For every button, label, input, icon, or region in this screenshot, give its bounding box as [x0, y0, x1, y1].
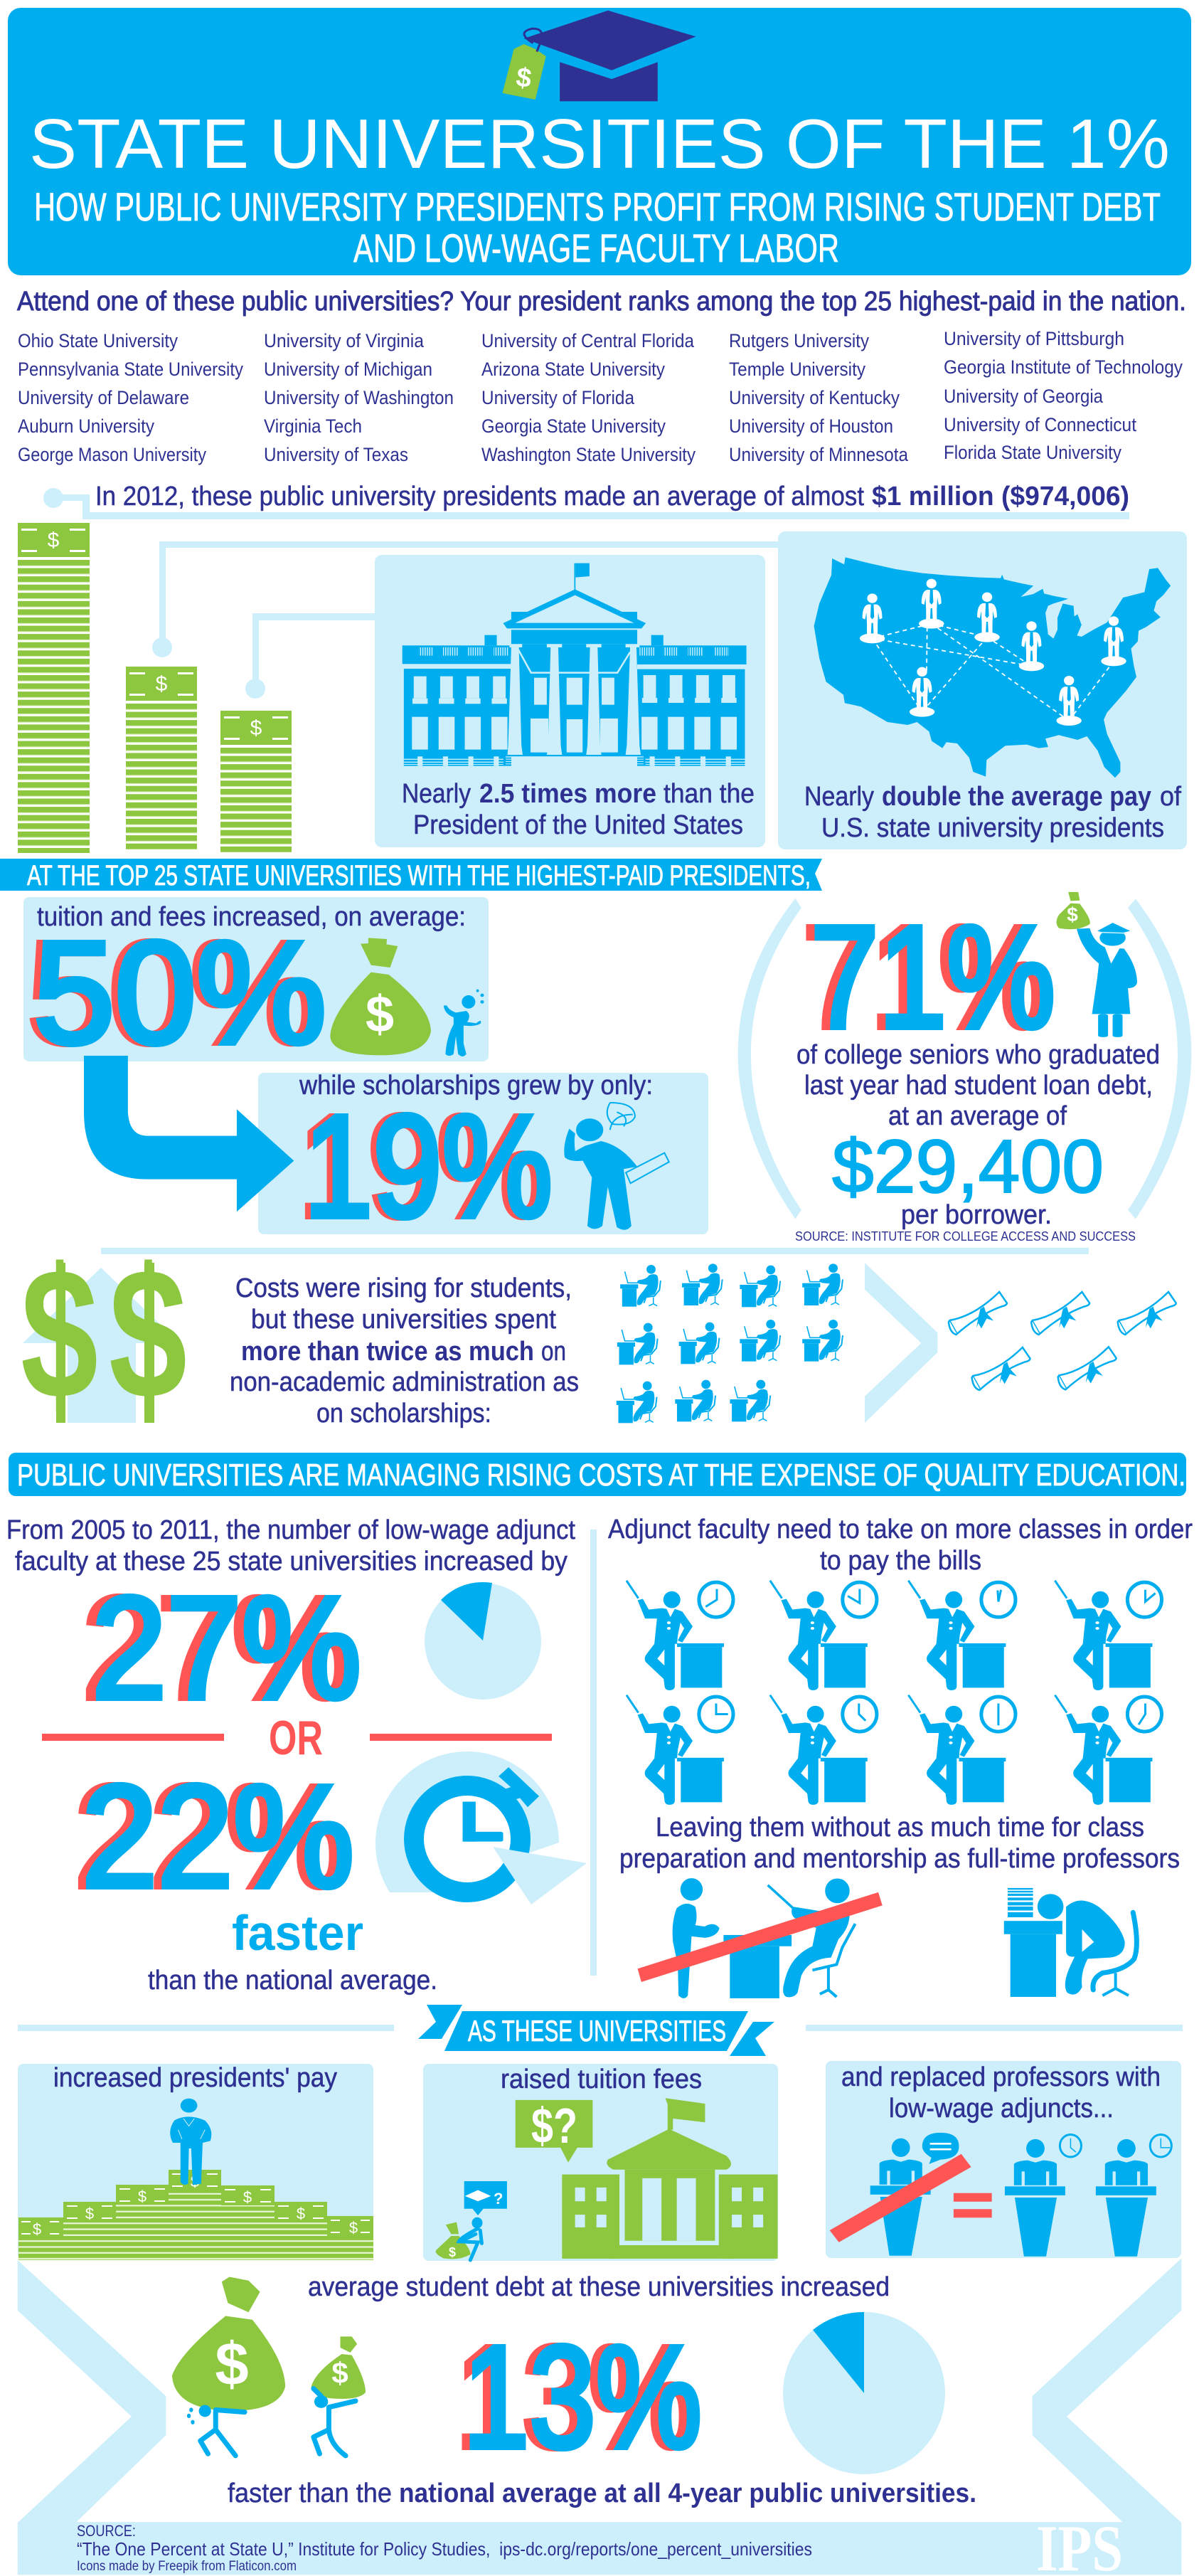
- panel: White House: [375, 555, 765, 847]
- university list: Pennsylvania State University: [18, 359, 243, 380]
- administration text: on scholarships:: [316, 1399, 491, 1429]
- icon: crossed-out mentoring: [638, 1878, 883, 1998]
- White House caption: 2.5 times more: [479, 779, 656, 809]
- ribbon heading: AS THESE UNIVERSITIES: [468, 2014, 726, 2047]
- divider: OR: OR: [269, 1711, 323, 1765]
- money stack: presidents: $: [48, 529, 60, 552]
- university list: University of Delaware: [18, 387, 189, 408]
- icon: graduation cap with price tag: [502, 11, 696, 101]
- money pyramid: $: [138, 2188, 146, 2205]
- university list: University of Georgia: [944, 386, 1104, 407]
- icon: person scratching head with diploma: [564, 1103, 669, 1230]
- university list: University of Florida: [481, 387, 635, 408]
- debt text: last year had student loan debt,: [804, 1071, 1153, 1101]
- university list: Florida State University: [944, 442, 1121, 463]
- money stack: presidents: [18, 523, 90, 853]
- university list: Rutgers University: [729, 330, 869, 351]
- panel: scholarships 19%: [258, 1071, 708, 1248]
- panel heading: [841, 2062, 1161, 2124]
- map caption: [804, 782, 1181, 843]
- icon: professor and adjuncts at podiums: [830, 2133, 1171, 2257]
- number: 71%: 71%: [811, 896, 1055, 1059]
- arrow: chevron: [865, 1263, 937, 1423]
- connector: top bar: [43, 488, 1129, 519]
- connector: panels: [152, 541, 785, 699]
- source block: [77, 2522, 812, 2574]
- White House caption: [402, 779, 755, 840]
- question mark: ?: [494, 2190, 503, 2207]
- university list: University of Minnesota: [729, 444, 909, 465]
- panel heading: increased presidents' pay: [53, 2063, 337, 2093]
- university list: Ohio State University: [18, 330, 178, 351]
- money stack: U.S. President: [126, 667, 197, 849]
- ribbon background: debt section: [18, 2258, 1181, 2575]
- source block: Icons made by Freepik from Flaticon.com: [77, 2559, 297, 2574]
- big bag dollar: $: [215, 2331, 249, 2398]
- panel heading: and replaced professors with: [841, 2062, 1161, 2092]
- average pay statement: In 2012, these public university presidents made an average of almost: [95, 482, 864, 512]
- money pyramid: $: [243, 2188, 252, 2206]
- number: 19%: 19%: [298, 1085, 547, 1248]
- than the national average: than the national average.: [148, 1966, 437, 1995]
- number: 27%: 27%: [82, 1567, 351, 1729]
- university list: Washington State University: [481, 444, 696, 465]
- icon group: diplomas: [949, 1292, 1176, 1390]
- tuition heading: tuition and fees increased, on average:: [37, 902, 466, 932]
- number: 50%: 50%: [27, 911, 320, 1074]
- money bag dollar sign: $: [366, 986, 394, 1043]
- administration text: non-academic administration as: [230, 1367, 579, 1397]
- money pyramid: [18, 2170, 373, 2260]
- adjunct classes text: to pay the bills: [820, 1546, 981, 1576]
- number: 13%: 13%: [463, 2316, 702, 2479]
- header banner: [8, 8, 1191, 275]
- panel: 71% callout: [738, 892, 1191, 1244]
- icon: rising costs arrow and dollars: [21, 1229, 187, 1438]
- number: 50%: 50%: [33, 911, 326, 1074]
- icon group: administrators at desks: [617, 1263, 843, 1423]
- university list: University of Pittsburgh: [944, 328, 1124, 349]
- section banner: quality education: [9, 1453, 1186, 1496]
- number: 13%: 13%: [455, 2316, 694, 2479]
- panel: tuition 50%: [23, 897, 489, 1074]
- word: faster: faster: [232, 1905, 363, 1961]
- White House caption: than the: [664, 779, 755, 809]
- number: 22%: 22%: [82, 1755, 354, 1918]
- university list: University of Central Florida: [481, 330, 695, 351]
- number: 27%: 27%: [92, 1567, 361, 1729]
- money pyramid: $: [33, 2220, 41, 2238]
- divider: OR: [42, 1711, 552, 1765]
- administration text: more than twice as much: [241, 1337, 534, 1367]
- adjunct classes text: [608, 1515, 1193, 1576]
- university list: Virginia Tech: [264, 415, 362, 437]
- adjunct growth text: [6, 1515, 575, 1576]
- number: $29,400: $29,400: [832, 1125, 1104, 1209]
- university list: University of Texas: [264, 444, 408, 465]
- debt conclusion: faster than the: [228, 2479, 392, 2508]
- ribbon heading: AT THE TOP 25 STATE UNIVERSITIES WITH THE HIGHEST-PAID PRESIDENTS,: [27, 860, 811, 891]
- tag dollar sign: $: [514, 63, 533, 94]
- source block: SOURCE:: [77, 2522, 136, 2540]
- panel: U.S. map: [778, 531, 1187, 849]
- university list: Auburn University: [18, 415, 154, 437]
- per borrower: per borrower.: [901, 1200, 1052, 1230]
- title: STATE UNIVERSITIES OF THE 1%: [29, 105, 1170, 183]
- debt text: [796, 1040, 1160, 1131]
- icon: stopwatch with circular arrow: [375, 1751, 587, 1904]
- section ribbon: top 25: [0, 859, 822, 891]
- money stack: state university average: [220, 711, 292, 852]
- icon group: teachers with clocks: [627, 1581, 1162, 1805]
- debt text: of college seniors who graduated: [796, 1040, 1160, 1070]
- arrow: tuition to scholarships: [84, 1056, 294, 1212]
- icon: university building: [516, 2098, 778, 2259]
- source block: “The One Percent at State U,” Institute for Policy Studies, ips-dc.org/reports/one_percent_universities: [77, 2538, 812, 2560]
- scholarships heading: while scholarships grew by only:: [299, 1071, 653, 1101]
- debt conclusion: national average at all 4-year public universities.: [399, 2479, 976, 2508]
- university list: Arizona State University: [481, 359, 665, 380]
- panel: raised tuition fees: [423, 2064, 778, 2261]
- icon: exhausted professor at desk: [1004, 1888, 1136, 1997]
- administration text: Costs were rising for students,: [235, 1273, 572, 1303]
- adjunct growth text: faculty at these 25 state universities increased by: [15, 1547, 567, 1576]
- icon: president standing on money: [170, 2099, 211, 2185]
- university list: University of Houston: [729, 415, 893, 437]
- icon: money bag and worried person: [330, 938, 484, 1056]
- university list: Temple University: [729, 359, 865, 380]
- subtitle line 2: AND LOW-WAGE FACULTY LABOR: [353, 226, 839, 270]
- university list: University of Connecticut: [944, 414, 1136, 435]
- icon: student with bag and question: [436, 2181, 507, 2260]
- debt heading: average student debt at these universities increased: [308, 2272, 890, 2302]
- pie chart: 13%: [783, 2312, 945, 2474]
- university list: University of Michigan: [264, 359, 432, 380]
- money stack: state university average: $: [250, 716, 262, 740]
- map caption: of: [1160, 782, 1181, 812]
- number: 19%: 19%: [304, 1085, 553, 1248]
- university list: George Mason University: [18, 444, 206, 465]
- graduate bag dollar sign: $: [1067, 903, 1078, 926]
- map caption: U.S. state university presidents: [821, 813, 1164, 843]
- panel heading: low-wage adjuncts...: [889, 2094, 1114, 2124]
- icon: graduate holding money bag: [1057, 892, 1137, 1037]
- icon: people carrying money bags: [172, 2277, 366, 2456]
- small bag dollar: $: [331, 2356, 348, 2390]
- money pyramid: $: [191, 2173, 199, 2190]
- preparation text: Leaving them without as much time for class: [656, 1813, 1144, 1843]
- panel heading: raised tuition fees: [501, 2064, 702, 2094]
- pie chart: 27%: [425, 1582, 541, 1700]
- administration text: [230, 1273, 579, 1429]
- average pay statement: $1 million ($974,006): [872, 482, 1129, 512]
- money stack: U.S. President: $: [156, 672, 168, 696]
- speech bubble text: $?: [531, 2098, 577, 2153]
- university list: [18, 328, 1183, 465]
- icon: U.S. map with presidents: [814, 557, 1171, 778]
- adjunct growth text: From 2005 to 2011, the number of low-wage adjunct: [6, 1515, 575, 1545]
- number: 71%: 71%: [802, 896, 1047, 1059]
- icon: rising costs arrow and dollars: $: [109, 1229, 187, 1438]
- icon: White House: [403, 563, 747, 766]
- brackets: [738, 899, 1191, 1219]
- White House caption: President of the United States: [413, 810, 743, 840]
- map caption: double the average pay: [882, 782, 1151, 812]
- small bag dollar: $: [449, 2245, 456, 2259]
- icon: rising costs arrow and dollars: $: [21, 1229, 98, 1438]
- university list: University of Washington: [264, 387, 454, 408]
- university list: University of Virginia: [264, 330, 425, 351]
- source: SOURCE: INSTITUTE FOR COLLEGE ACCESS AND SUCCESS: [795, 1229, 1136, 1244]
- money pyramid: $: [297, 2205, 305, 2222]
- money pyramid: $: [85, 2205, 94, 2222]
- university list: Georgia State University: [481, 415, 666, 437]
- White House caption: Nearly: [402, 779, 471, 809]
- panel: replaced professors: [826, 2061, 1181, 2258]
- administration text: but these universities spent: [251, 1305, 556, 1335]
- panel: increased presidents' pay: [18, 2063, 373, 2260]
- preparation text: [619, 1813, 1180, 1874]
- debt text: at an average of: [888, 1101, 1067, 1131]
- administration text: on: [541, 1337, 566, 1367]
- number: 22%: 22%: [74, 1755, 346, 1918]
- money pyramid: $: [349, 2219, 358, 2237]
- university list: University of Kentucky: [729, 387, 900, 408]
- section ribbon: as these universities: [18, 2005, 1183, 2056]
- map caption: Nearly: [804, 782, 874, 812]
